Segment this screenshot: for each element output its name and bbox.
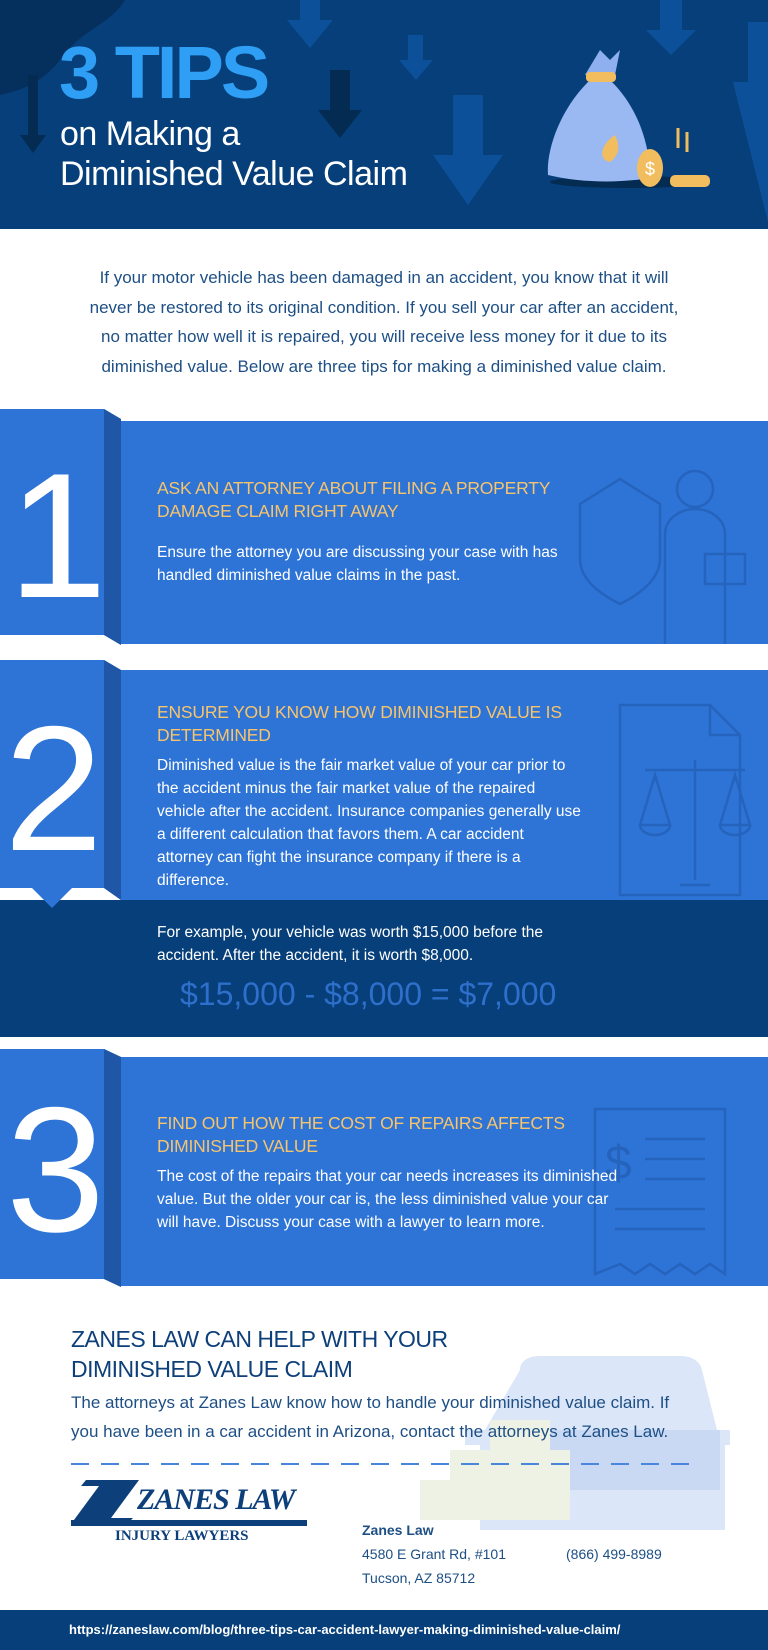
heading: Zanes Law can help: DIMINISHED VALUE CLAIM (71, 1356, 352, 1382)
body 2 (157, 757, 581, 889)
footer url bar (0, 1610, 768, 1650)
body 3: will have. Discuss your case with a lawyer to learn more. (157, 1214, 545, 1231)
contact info (362, 1522, 662, 1586)
intro paragraph: If your motor vehicle has been damaged in an accident, you know that it will (100, 268, 668, 287)
body 2: difference. (157, 872, 229, 889)
header banner (0, 0, 768, 229)
heading 2: DETERMINED (157, 725, 271, 745)
heading 3: DIMINISHED VALUE (157, 1136, 318, 1156)
body 2: a different calculation that favors them. A car accident (157, 826, 524, 843)
illustration: faded car and money (420, 1356, 730, 1530)
example text (157, 924, 543, 964)
subtitle: Diminished Value Claim (60, 155, 407, 193)
body 1 (157, 544, 558, 584)
footer url bar: https://zaneslaw.com/blog/three-tips-car-accident-lawyer-making-diminished-value-claim/ (69, 1622, 620, 1637)
example text: For example, your vehicle was worth $15,000 before the (157, 924, 543, 941)
panel: tip 2 (0, 660, 768, 1037)
body 2: attorney can fight the insurance company if there is a (157, 849, 521, 866)
heading 2 (157, 702, 562, 745)
number 3: 3 (6, 1070, 105, 1269)
title: 3 TIPS: 3 TIPS (59, 31, 267, 114)
heading 1: ASK AN ATTORNEY ABOUT FILING A PROPERTY (157, 478, 550, 498)
heading 3: FIND OUT HOW THE COST OF REPAIRS AFFECTS (157, 1113, 565, 1133)
formula: $15,000 - $8,000 = $7,000 (180, 976, 556, 1012)
contact info: Tucson, AZ 85712 (362, 1570, 475, 1586)
number 1: 1 (8, 436, 107, 635)
heading: Zanes Law can help: ZANES LAW CAN HELP WITH YOUR (71, 1326, 448, 1352)
panel: tip 3: $ (605, 1137, 632, 1190)
logo tagline: INJURY LAWYERS (115, 1528, 249, 1544)
body 2: Diminished value is the fair market value of your car prior to (157, 757, 565, 774)
body 3: The cost of the repairs that your car needs increases its diminished (157, 1168, 617, 1185)
heading: Zanes Law can help (71, 1326, 448, 1382)
body 3 (157, 1168, 617, 1231)
number 2: 2 (4, 689, 103, 888)
example text: accident. After the accident, it is worth $8,000. (157, 947, 473, 964)
body 1: Ensure the attorney you are discussing your case with has (157, 544, 558, 561)
panel: tip 3 (0, 1049, 768, 1287)
heading 1 (157, 478, 550, 521)
decorative arrows and blob (0, 0, 768, 222)
logo: Zanes Law: ZANES LAW (137, 1483, 294, 1516)
body 3: value. But the older your car is, the less diminished value your car (157, 1191, 608, 1208)
heading 2: ENSURE YOU KNOW HOW DIMINISHED VALUE IS (157, 702, 562, 722)
contact info: Zanes Law (362, 1522, 434, 1538)
intro paragraph: never be restored to its original condition. If you sell your car after an accident, (90, 298, 678, 316)
icon: money bag with coins (548, 50, 710, 188)
subtitle: on Making a (60, 115, 240, 153)
heading 1: DAMAGE CLAIM RIGHT AWAY (157, 501, 398, 521)
closing paragraph: you have been in a car accident in Arizona, contact the attorneys at Zanes Law. (71, 1422, 668, 1441)
closing paragraph: The attorneys at Zanes Law know how to handle your diminished value claim. If (71, 1393, 669, 1412)
intro paragraph: no matter how well it is repaired, you will receive less money for it due to its (101, 327, 667, 346)
intro paragraph: diminished value. Below are three tips for making a diminished value claim. (101, 356, 667, 376)
logo: Zanes Law (71, 1480, 307, 1544)
body 2: the accident minus the fair market value of the repaired (157, 780, 535, 797)
closing paragraph (71, 1393, 670, 1441)
body 2: vehicle after the accident. Insurance companies generally use (157, 803, 581, 820)
panel: tip 1 (0, 409, 768, 645)
contact info: 4580 E Grant Rd, #101 (362, 1546, 506, 1562)
subtitle (60, 115, 407, 193)
heading 3 (157, 1113, 565, 1156)
intro paragraph (90, 268, 678, 376)
icon: money bag with coins: $ (645, 159, 655, 179)
phone: (866) 499-8989 (566, 1546, 662, 1562)
body 1: handled diminished value claims in the past. (157, 567, 460, 584)
